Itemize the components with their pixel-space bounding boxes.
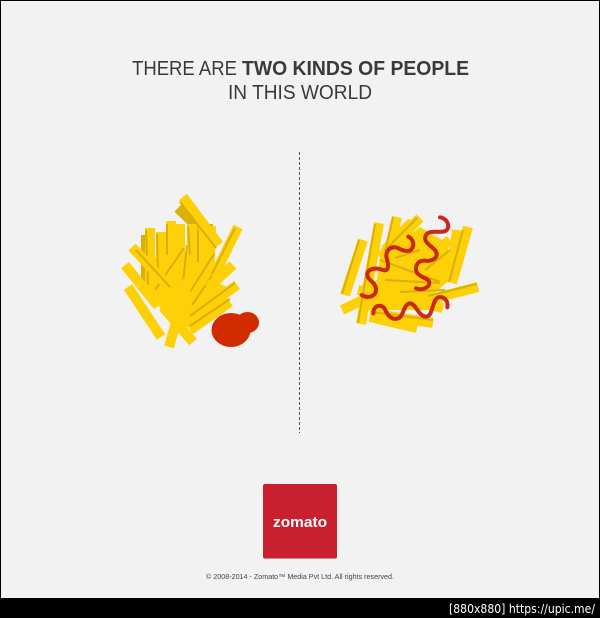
logo: zomato: [263, 484, 337, 558]
copyright line: © 2008-2014 - Zomato™ Media Pvt Ltd. All rights reserved.: [206, 573, 394, 581]
illustration: fries with ketchup on the side: [125, 197, 259, 347]
fries pile left: [125, 197, 238, 347]
ketchup squiggles: [362, 217, 448, 319]
title: TWO KINDS OF PEOPLE: [242, 58, 469, 80]
title: THERE ARE: [132, 58, 237, 80]
bottom watermark bar: [0, 598, 600, 618]
fries pile right: [342, 217, 478, 328]
illustration: fries with ketchup squiggles on top: [342, 217, 478, 328]
divider: dashed vertical line: [298, 152, 300, 433]
logo: zomato: zomato: [273, 514, 327, 531]
title: [132, 58, 469, 104]
ketchup blob: [212, 312, 259, 347]
title: IN THIS WORLD: [228, 82, 372, 104]
